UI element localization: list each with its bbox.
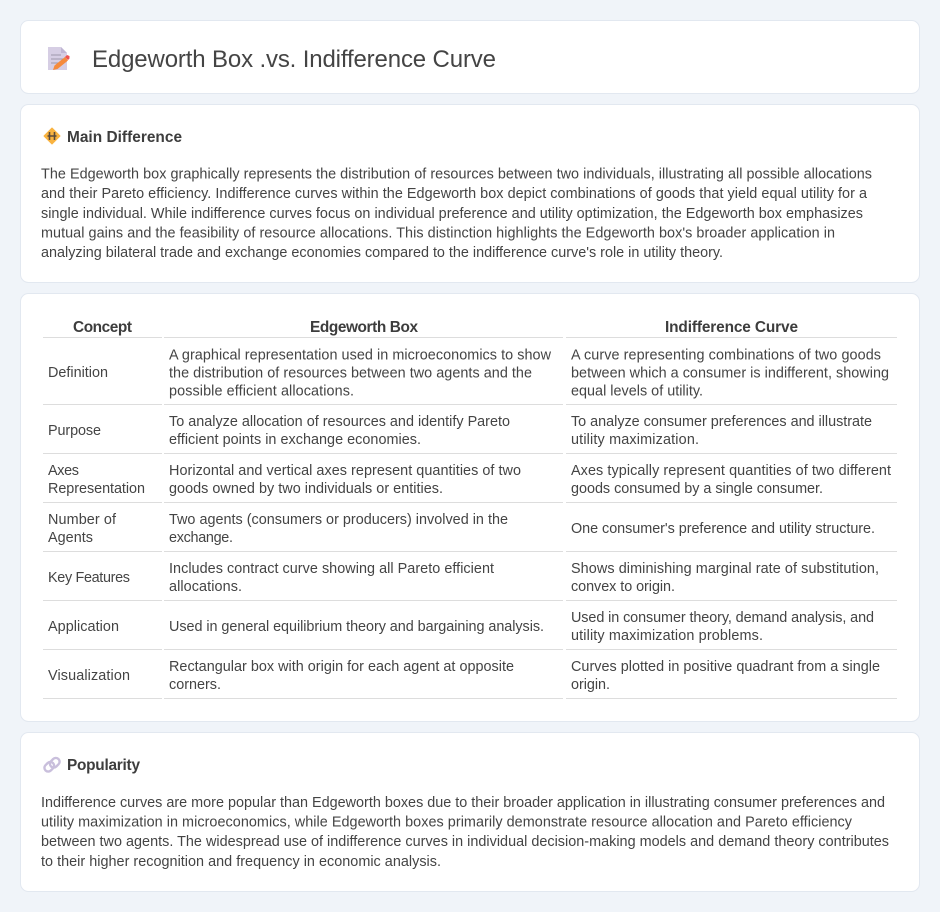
table row: definition: the distribution of resources between two agents and the	[169, 365, 532, 381]
text block: popularity body: between two agents. The widespread use of indifference curves in individual decision-making models and demand theory contributes	[41, 834, 889, 850]
text block: main difference body: The Edgeworth box graphically represents the distribution of resources between two individuals, illustrating all possible allocations	[41, 167, 872, 183]
table header row: Indifference Curve	[665, 319, 798, 336]
icon: diamond road sign	[44, 128, 60, 144]
table row: definition: between which a consumer is indifferent, showing	[571, 365, 889, 381]
table row: key features: Key Features	[48, 570, 130, 586]
table row: visualization: corners.	[169, 677, 221, 693]
table row: key features: Shows diminishing marginal rate of substitution,	[571, 561, 879, 577]
table header row: Edgeworth Box	[310, 319, 418, 336]
table row: axes representation: Axes	[48, 463, 79, 479]
table row: purpose	[48, 414, 872, 448]
table row: key features: allocations.	[169, 579, 242, 595]
table row: definition	[48, 347, 889, 399]
table row: application: utility maximization problems.	[571, 628, 763, 644]
table header row: Concept	[73, 319, 132, 336]
table row: axes representation	[48, 463, 891, 497]
table row: axes representation: Axes typically represent quantities of two different	[571, 463, 891, 479]
text block: popularity body: utility maximization in microeconomics, while Edgeworth boxes primarily demonstrate resource allocation and Pareto efficiency	[41, 815, 853, 831]
panel: main difference	[20, 104, 920, 282]
table row: application	[48, 610, 874, 644]
text block: main difference body: mutual gains and the feasibility of resource allocations. This distinction highlights the Edgeworth box's broader application in	[41, 225, 835, 241]
table row: number of agents: Number of	[48, 512, 117, 528]
icon: document with pencil	[48, 47, 70, 70]
table row: visualization: Curves plotted in positive quadrant from a single	[571, 659, 880, 675]
table row: number of agents: Agents	[48, 530, 93, 546]
table row: key features	[48, 561, 879, 595]
table row: visualization: Rectangular box with origin for each agent at opposite	[169, 659, 514, 675]
icon: chain link	[43, 756, 61, 773]
table row: key features: Includes contract curve showing all Pareto efficient	[169, 561, 494, 577]
table row: key features: convex to origin.	[571, 579, 675, 595]
table row: purpose: efficient points in exchange economies.	[169, 432, 421, 448]
text block: popularity body	[41, 795, 889, 870]
table row: number of agents: One consumer's preference and utility structure.	[571, 521, 875, 537]
table row: axes representation: goods consumed by a single consumer.	[571, 481, 823, 497]
table row: purpose: To analyze consumer preferences and illustrate	[571, 414, 872, 430]
text block: popularity body: to their higher recognition and frequency in economic analysis.	[41, 854, 441, 870]
table row: purpose: To analyze allocation of resources and identify Pareto	[169, 414, 510, 430]
table row: definition: A graphical representation used in microeconomics to show	[169, 347, 552, 363]
table row: definition: possible efficient allocations.	[169, 383, 354, 399]
table row: axes representation: Representation	[48, 481, 145, 497]
text block: main difference body: single individual. While indifference curves focus on individual preference and utility optimization, the Edgeworth box emphasizes	[41, 206, 863, 222]
heading: popularity: Popularity	[67, 757, 140, 774]
table header row	[73, 319, 798, 336]
text block: main difference body: and their Pareto efficiency. Indifference curves within the Edgeworth box depict combinations of goods that yield equal utility for a	[41, 186, 867, 202]
heading: main difference: Main Difference	[67, 129, 182, 146]
table row: number of agents: Two agents (consumers or producers) involved in the	[169, 512, 508, 528]
table row: application: Used in general equilibrium theory and bargaining analysis.	[169, 619, 544, 635]
table row: visualization: Visualization	[48, 668, 130, 684]
table row: axes representation: goods owned by two individuals or entities.	[169, 481, 443, 497]
table row: number of agents	[48, 512, 875, 546]
title: Edgeworth Box .vs. Indifference Curve	[92, 46, 496, 73]
panel: comparison table	[20, 294, 920, 722]
table row: definition: A curve representing combinations of two goods	[571, 347, 881, 363]
table row: visualization: origin.	[571, 677, 610, 693]
text block: main difference body: analyzing bilateral trade and exchange economies compared to the indifference curve's role in utility theory.	[41, 245, 723, 261]
table row: application: Application	[48, 619, 119, 635]
table row: purpose: Purpose	[48, 423, 101, 439]
table row: visualization	[48, 659, 880, 693]
table row: definition: equal levels of utility.	[571, 383, 703, 399]
table row: purpose: utility maximization.	[571, 432, 699, 448]
text block: popularity body: Indifference curves are more popular than Edgeworth boxes due to their broader application in illustrating consumer preferences and	[41, 795, 885, 811]
panel: header	[20, 20, 920, 94]
table row: application: Used in consumer theory, demand analysis, and	[571, 610, 874, 626]
text block: main difference body	[41, 167, 872, 261]
table row: number of agents: exchange.	[169, 530, 233, 546]
panel: popularity	[20, 732, 920, 892]
table row: definition: Definition	[48, 365, 108, 381]
table row: axes representation: Horizontal and vertical axes represent quantities of two	[169, 463, 521, 479]
